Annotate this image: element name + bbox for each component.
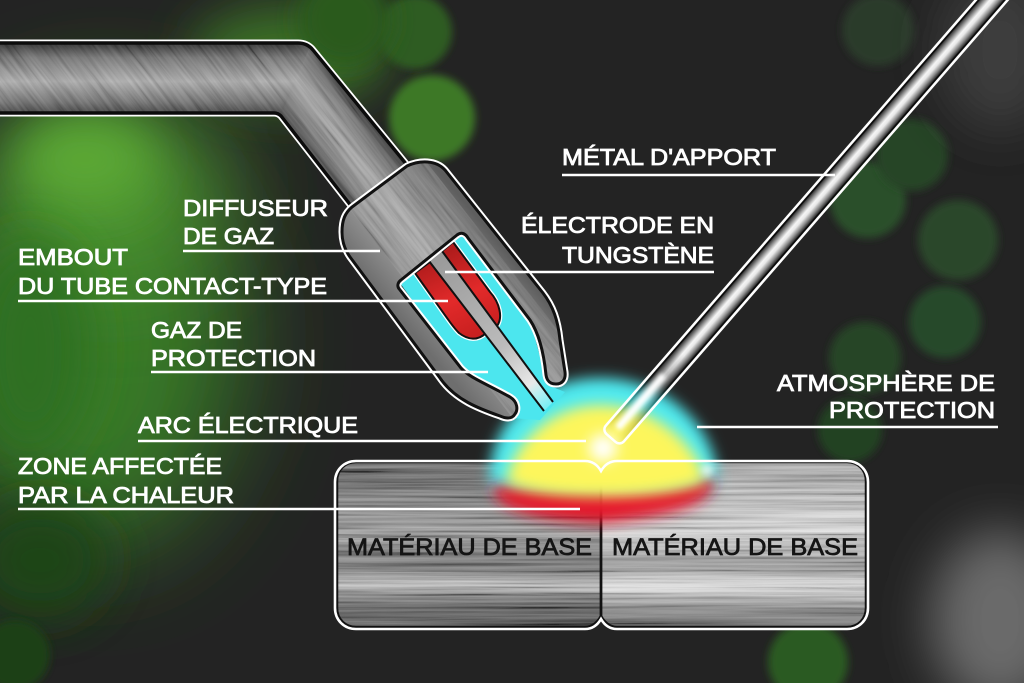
torch nozzle [338,158,569,422]
label: gaz de protection: GAZ DE [151,317,242,343]
label: gaz de protection [151,317,488,372]
tungsten electrode [429,251,553,411]
label: zone affectée par la chaleur: ZONE AFFECTÉE [18,453,222,479]
filler metal rod [602,0,1024,446]
label: zone affectée par la chaleur [18,453,580,509]
label: gaz de protection: PROTECTION [151,345,316,371]
contact tube red right [441,242,500,326]
block: right [600,460,870,630]
label: arc électrique: ARC ÉLECTRIQUE [138,412,358,438]
label: électrode en tungstène: ÉLECTRODE EN [521,212,714,238]
label: embout du tube contact-type: DU TUBE CONTACT-TYPE [18,273,327,299]
label: diffuseur de gaz: DIFFUSEUR [183,195,328,221]
label: zone affectée par la chaleur: PAR LA CHALEUR [18,482,234,508]
label: électrode en tungstène [445,212,714,272]
label: diffuseur de gaz [183,195,380,251]
shielding gas [400,233,565,420]
label: atmosphère de protection: PROTECTION [829,397,995,423]
base material blocks [335,460,870,630]
contact tube red left [415,262,486,339]
label: métal d'apport: MÉTAL D'APPORT [562,144,776,170]
label: atmosphère de protection: ATMOSPHÈRE DE [777,370,995,396]
label: base material right: MATÉRIAU DE BASE [612,534,858,561]
block: left [335,460,602,630]
label: embout du tube contact-type: EMBOUT [18,244,128,270]
nozzle body [342,162,565,418]
label: électrode en tungstène: TUNGSTÈNE [562,242,714,268]
white outlines of blocks [335,461,868,629]
label: atmosphère de protection [697,370,998,427]
label: base material left: MATÉRIAU DE BASE [347,534,592,561]
weld glow: shielding atmosphere, pool and heat zone [490,378,718,523]
label: diffuseur de gaz: DE GAZ [183,223,274,249]
label: embout du tube contact-type [18,244,448,301]
torch tube [0,40,408,207]
